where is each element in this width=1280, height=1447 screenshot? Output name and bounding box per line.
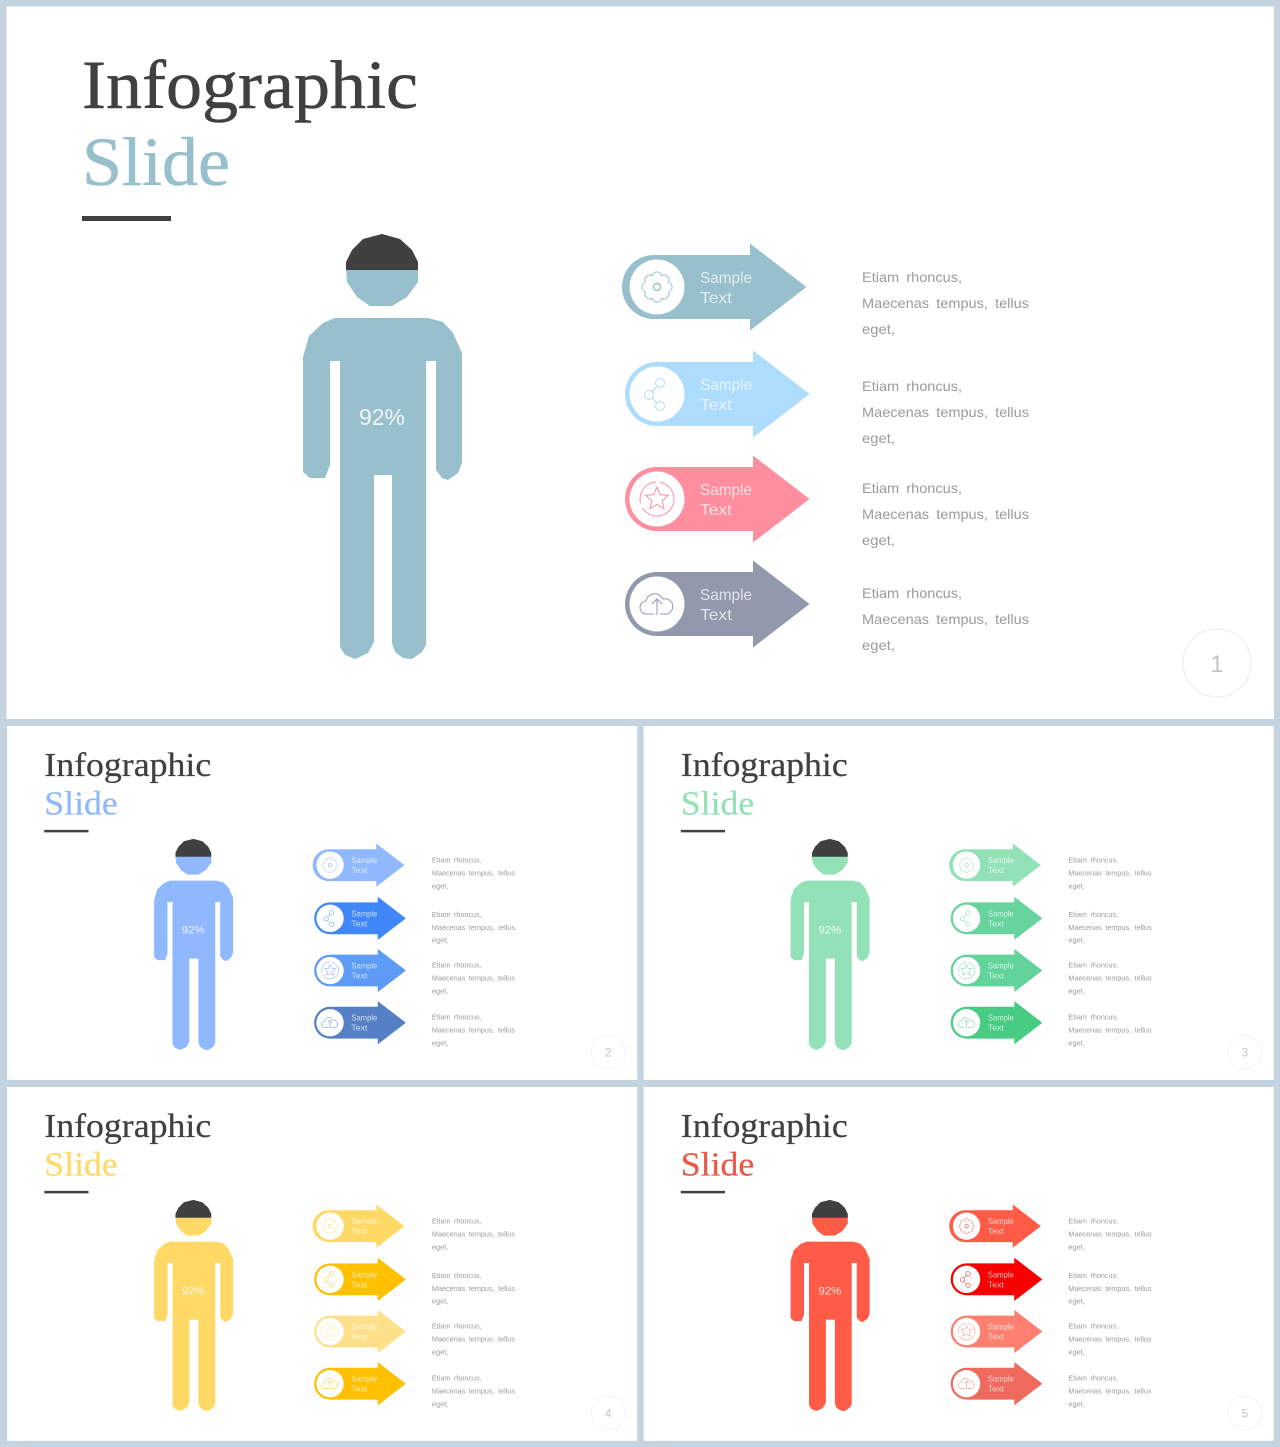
arrow 3: star: Text (351, 971, 368, 980)
text block 2: Etiam rhoncus, (1068, 912, 1118, 919)
arrow 4: cloud: Text (351, 1385, 368, 1394)
text block 4 (862, 585, 1029, 653)
text block 1: Etiam rhoncus, (1068, 1219, 1118, 1226)
text block 3: eget, (1068, 1349, 1085, 1356)
title: Slide (681, 1145, 754, 1183)
text block 1: Etiam rhoncus, (432, 858, 482, 865)
arrow 2: share: Text (351, 919, 368, 928)
arrow 1: gear (949, 1205, 1041, 1248)
text block 3: Etiam rhoncus, (432, 1324, 482, 1331)
text block 3: Maecenas tempus, tellus (432, 975, 515, 982)
text block 4: eget, (1068, 1402, 1085, 1409)
slide 5: red (644, 1087, 1274, 1441)
arrow 3: star: Text (700, 502, 733, 519)
title (681, 746, 848, 822)
text block 2: Etiam rhoncus, (1068, 1273, 1118, 1280)
arrow 2: share: Text (700, 397, 733, 414)
text block 1: Maecenas tempus, tellus (1068, 1232, 1152, 1239)
page number 2: 2 (605, 1046, 612, 1060)
arrow 4: cloud (951, 1001, 1042, 1044)
text block 1: eget, (1068, 884, 1085, 891)
text block 1: Maecenas tempus, tellus (862, 295, 1029, 311)
arrow 3: star (625, 456, 810, 542)
title: Infographic (82, 47, 418, 123)
page number 5 (1228, 1396, 1262, 1430)
text block 3: eget, (432, 1349, 448, 1356)
arrow 4: cloud (625, 560, 810, 648)
text block 4 (432, 1376, 515, 1409)
text block 1: Etiam rhoncus, (1068, 858, 1118, 865)
text block 1: Maecenas tempus, tellus (432, 871, 515, 878)
arrow 1: gear: Sample (700, 270, 752, 287)
slide 4: yellow (7, 1087, 637, 1441)
human figure with 92% (154, 1200, 233, 1411)
human figure with 92%: 92% (182, 925, 205, 937)
title: Slide (44, 784, 118, 822)
arrow 2: share: Sample (988, 1270, 1014, 1279)
text block 1 (1068, 858, 1152, 891)
arrow 1: gear: Text (351, 866, 368, 875)
text block 4: Maecenas tempus, tellus (1068, 1028, 1152, 1035)
text block 3: Maecenas tempus, tellus (1068, 1336, 1152, 1343)
title: Infographic (44, 746, 211, 784)
arrow 4: cloud (951, 1362, 1042, 1405)
page number 4 (591, 1396, 625, 1430)
text block 3: Maecenas tempus, tellus (1068, 975, 1152, 982)
arrow 2: share: Text (988, 919, 1005, 928)
text block 2 (1068, 912, 1152, 945)
page number 1 (1183, 629, 1251, 697)
arrow 4: cloud: Sample (351, 1375, 378, 1384)
text block 3: Etiam rhoncus, (1068, 963, 1118, 970)
text block 1 (1068, 1219, 1152, 1252)
human figure with 92%: 92% (818, 925, 841, 937)
text block 4: Maecenas tempus, tellus (1068, 1389, 1152, 1396)
text block 2: eget, (432, 1299, 448, 1306)
text block 2 (432, 912, 515, 945)
arrow 3: star: Sample (351, 962, 378, 971)
text block 1: Maecenas tempus, tellus (432, 1232, 515, 1239)
arrow 3: star (314, 949, 406, 992)
arrow 1: gear: Text (351, 1227, 368, 1236)
arrow 3: star: Sample (351, 1323, 378, 1332)
text block 3 (1068, 1324, 1152, 1356)
title (82, 47, 418, 200)
text block 3: Etiam rhoncus, (432, 963, 482, 970)
arrow 4: cloud (314, 1001, 406, 1044)
arrow 4: cloud: Text (700, 607, 733, 624)
arrow 3: star: Sample (988, 1323, 1014, 1332)
arrow 1: gear: Text (988, 866, 1005, 875)
arrow 3: star: Sample (700, 482, 752, 499)
arrow 4: cloud: Sample (351, 1014, 378, 1023)
text block 4: Etiam rhoncus, (432, 1015, 482, 1022)
text block 2: Maecenas tempus, tellus (862, 404, 1029, 420)
arrow 3: star: Text (988, 971, 1005, 980)
arrow 3: star (314, 1310, 406, 1353)
human figure with 92%: 92% (182, 1286, 205, 1298)
text block 3 (1068, 963, 1152, 995)
arrow 4: cloud: Text (988, 1024, 1005, 1033)
arrow 3: star (951, 949, 1042, 992)
title underline (681, 1191, 725, 1193)
page number 2 (591, 1035, 625, 1069)
text block 2: eget, (432, 938, 448, 945)
arrow 3: star: Text (351, 1332, 368, 1341)
human figure with 92%: 92% (818, 1286, 841, 1298)
text block 4: eget, (432, 1041, 448, 1048)
text block 3 (862, 480, 1029, 548)
arrow 4: cloud: Sample (700, 587, 752, 604)
text block 3: eget, (432, 988, 448, 995)
arrow 4: cloud (314, 1362, 406, 1405)
page number 3: 3 (1242, 1046, 1249, 1060)
arrow 2: share (625, 350, 810, 438)
text block 4: eget, (432, 1402, 448, 1409)
title: Slide (681, 784, 754, 822)
arrow 3: star: Text (988, 1332, 1005, 1341)
title (44, 746, 211, 822)
arrow 4: cloud: Text (351, 1024, 368, 1033)
text block 1 (432, 1219, 515, 1252)
text block 1: eget, (432, 1245, 448, 1252)
text block 2: Maecenas tempus, tellus (432, 1286, 515, 1293)
text block 1: Maecenas tempus, tellus (1068, 871, 1152, 878)
arrow 2: share (951, 897, 1042, 940)
slide 1: large main slide (6, 6, 1274, 719)
human figure with 92%: 92% (359, 404, 405, 430)
title: Infographic (681, 1107, 848, 1145)
arrow 2: share (314, 897, 406, 940)
page number 5: 5 (1242, 1407, 1249, 1421)
text block 1 (432, 858, 515, 891)
text block 1: Etiam rhoncus, (432, 1219, 482, 1226)
text block 4 (1068, 1376, 1152, 1409)
text block 3: Etiam rhoncus, (862, 480, 962, 496)
text block 4 (432, 1015, 515, 1048)
text block 4: Maecenas tempus, tellus (862, 611, 1029, 627)
text block 2: eget, (1068, 1299, 1085, 1306)
text block 3: Maecenas tempus, tellus (432, 1336, 515, 1343)
text block 1: Etiam rhoncus, (862, 269, 962, 285)
text block 1 (862, 269, 1029, 337)
text block 3 (432, 1324, 515, 1356)
title: Infographic (681, 746, 848, 784)
title: Infographic (44, 1107, 211, 1145)
text block 2 (1068, 1273, 1152, 1306)
arrow 2: share: Sample (351, 909, 378, 918)
title (44, 1107, 211, 1183)
arrow 1: gear: Sample (988, 1217, 1014, 1226)
arrow 1: gear: Sample (351, 1217, 378, 1226)
text block 3: eget, (862, 532, 895, 548)
slide 2: blue (7, 726, 637, 1080)
text block 2: eget, (862, 430, 895, 446)
text block 4: Etiam rhoncus, (1068, 1015, 1118, 1022)
arrow 2: share: Text (988, 1280, 1005, 1289)
arrow 3: star (951, 1310, 1042, 1353)
arrow 1: gear (313, 1205, 404, 1248)
arrow 2: share: Sample (351, 1270, 378, 1279)
arrow 3: star: Sample (988, 962, 1014, 971)
text block 4: Maecenas tempus, tellus (432, 1389, 515, 1396)
text block 4: Etiam rhoncus, (432, 1376, 482, 1383)
text block 2: Maecenas tempus, tellus (1068, 925, 1152, 932)
page number 1: 1 (1210, 651, 1224, 678)
title: Slide (82, 124, 230, 200)
arrow 2: share (314, 1258, 406, 1301)
text block 1: eget, (862, 321, 895, 337)
text block 3: eget, (1068, 988, 1085, 995)
human figure with 92% (791, 839, 870, 1050)
text block 2: Maecenas tempus, tellus (1068, 1286, 1152, 1293)
text block 3: Maecenas tempus, tellus (862, 506, 1029, 522)
arrow 1: gear (622, 244, 806, 330)
arrow 4: cloud: Text (988, 1385, 1005, 1394)
title (681, 1107, 848, 1183)
arrow 4: cloud: Sample (988, 1014, 1014, 1023)
text block 2: Etiam rhoncus, (432, 912, 482, 919)
arrow 1: gear (949, 844, 1041, 887)
text block 4: Etiam rhoncus, (862, 585, 962, 601)
page number 4: 4 (605, 1407, 612, 1421)
text block 4: Etiam rhoncus, (1068, 1376, 1118, 1383)
text block 3: Etiam rhoncus, (1068, 1324, 1118, 1331)
title underline (681, 830, 725, 832)
title underline (44, 1191, 89, 1193)
arrow 2: share: Text (351, 1280, 368, 1289)
text block 1: eget, (1068, 1245, 1085, 1252)
text block 4 (1068, 1015, 1152, 1048)
title: Slide (44, 1145, 118, 1183)
arrow 2: share (951, 1258, 1042, 1301)
arrow 2: share: Sample (700, 377, 752, 394)
human figure with 92% (303, 234, 462, 659)
title underline (82, 216, 171, 221)
text block 4: eget, (1068, 1041, 1085, 1048)
arrow 1: gear (313, 844, 404, 887)
page number 3 (1228, 1035, 1262, 1069)
text block 2: eget, (1068, 938, 1085, 945)
text block 2: Etiam rhoncus, (432, 1273, 482, 1280)
human figure with 92% (791, 1200, 870, 1411)
text block 3 (432, 963, 515, 995)
title underline (44, 830, 89, 832)
arrow 1: gear: Sample (351, 856, 378, 865)
text block 4: eget, (862, 637, 895, 653)
text block 4: Maecenas tempus, tellus (432, 1028, 515, 1035)
text block 2: Maecenas tempus, tellus (432, 925, 515, 932)
arrow 1: gear: Sample (988, 856, 1014, 865)
text block 2 (862, 378, 1029, 446)
arrow 1: gear: Text (988, 1227, 1005, 1236)
arrow 2: share: Sample (988, 909, 1014, 918)
arrow 1: gear: Text (700, 290, 733, 307)
text block 2 (432, 1273, 515, 1306)
human figure with 92% (154, 839, 233, 1050)
text block 2: Etiam rhoncus, (862, 378, 962, 394)
text block 1: eget, (432, 884, 448, 891)
slide 3: green (644, 726, 1274, 1080)
arrow 4: cloud: Sample (988, 1375, 1014, 1384)
